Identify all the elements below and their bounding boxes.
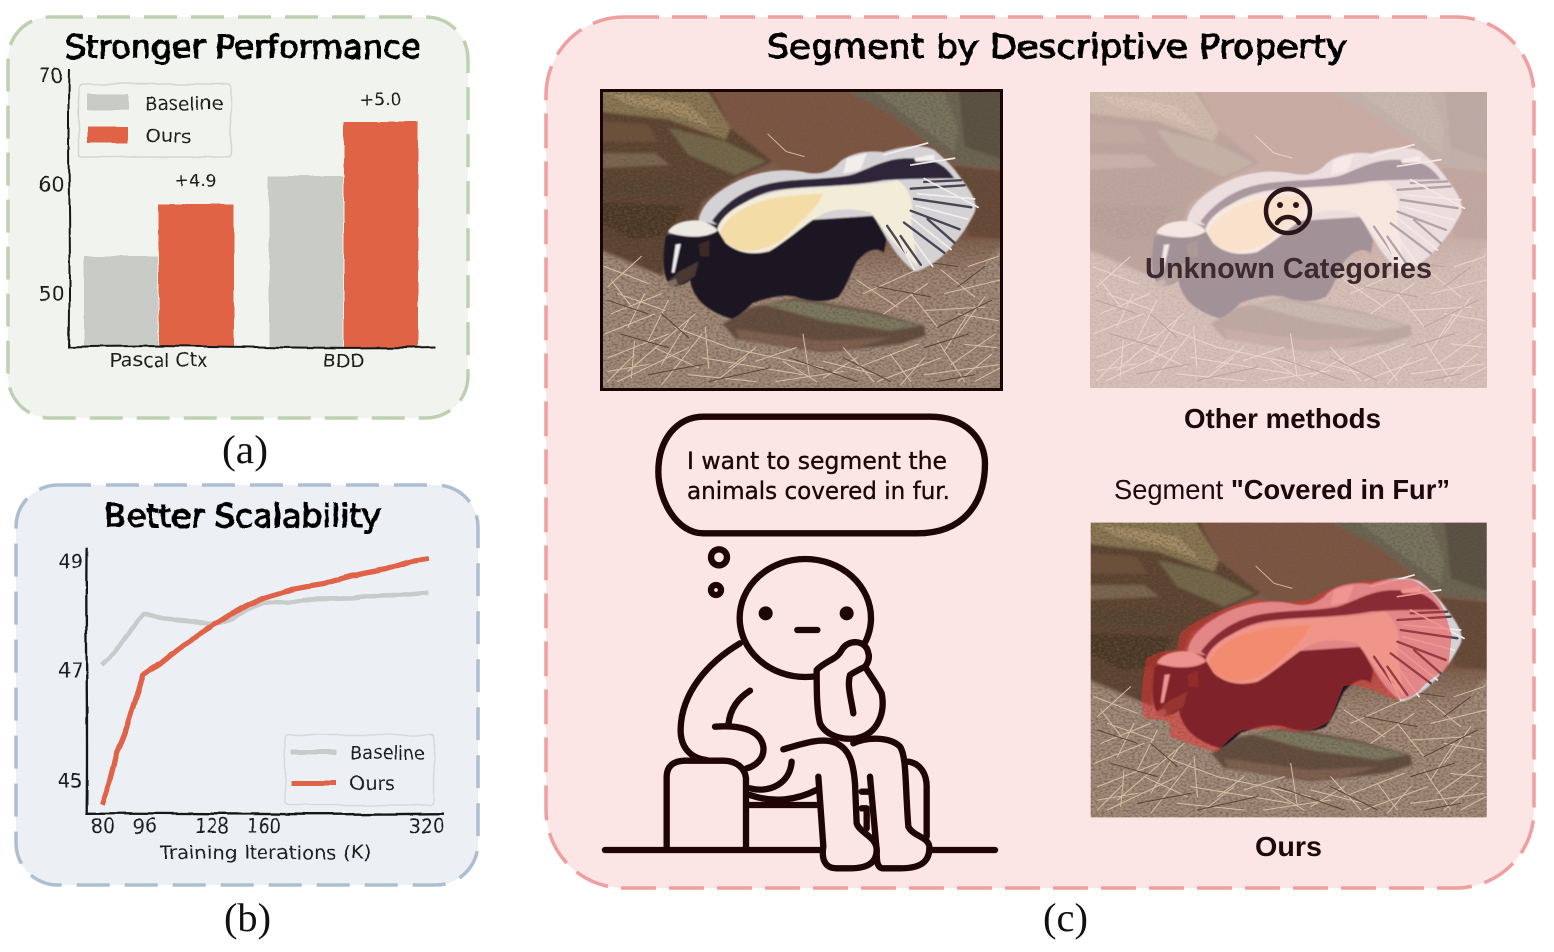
- heading: Better Scalability: Better Scalability: [104, 497, 381, 535]
- legend: Baseline: [145, 93, 223, 115]
- panel c: segment by descriptive property: [546, 17, 1534, 888]
- line chart: training iterations: 80: [90, 814, 115, 838]
- line chart: training iterations: 128: [195, 814, 229, 838]
- line chart: training iterations: 47: [58, 659, 83, 683]
- bar chart: performance comparison: 50: [39, 282, 64, 306]
- photo: other methods result: [1083, 86, 1494, 394]
- caption (c): (c): [1043, 895, 1088, 940]
- bar chart: performance comparison: BDD: [323, 350, 365, 372]
- panel a: stronger performance: [8, 17, 468, 418]
- line chart: training iterations: 96: [133, 814, 157, 838]
- legend: [285, 735, 434, 805]
- bar chart: performance comparison: +4.9: [175, 171, 216, 192]
- bar chart: performance comparison: [39, 64, 436, 372]
- icon: thinking person: [605, 549, 995, 868]
- panel b: better scalability: [16, 485, 478, 885]
- bar chart: performance comparison: 60: [39, 173, 64, 197]
- line chart: training iterations: 160: [247, 814, 281, 838]
- thought bubble: animals covered in fur.: [687, 477, 950, 505]
- label: Unknown Categories: Unknown Categories: [1145, 253, 1432, 285]
- legend: Ours: [145, 125, 191, 147]
- caption (a): (a): [222, 427, 268, 472]
- heading: Stronger Performance: Stronger Performance: [65, 28, 421, 66]
- thought bubble: I want to segment the: [687, 447, 947, 475]
- label: Ours: Ours: [1255, 831, 1322, 862]
- bar chart: performance comparison: 70: [39, 64, 63, 88]
- legend: [79, 84, 231, 157]
- photo: our segmentation result: [1084, 517, 1494, 823]
- line chart: training iterations: 320: [409, 814, 445, 838]
- thought bubble: [658, 417, 985, 533]
- photo: input skunk: [594, 84, 1008, 395]
- legend: Ours: [350, 773, 395, 795]
- line chart: training iterations: 45: [58, 769, 83, 793]
- legend: Baseline: [350, 742, 425, 764]
- icon: sad face: [1266, 189, 1310, 233]
- heading: Segment by Descriptive Property: Segment by Descriptive Property: [767, 27, 1347, 66]
- line chart: training iterations: Training Iterations (K): [159, 842, 371, 864]
- line chart: training iterations: 49: [58, 549, 83, 573]
- bar chart: performance comparison: +5.0: [360, 89, 401, 110]
- bar chart: performance comparison: Pascal Ctx: [110, 350, 208, 372]
- line chart: training iterations: [58, 547, 445, 864]
- caption (b): (b): [224, 895, 271, 940]
- label: Segment "Covered in Fur": Segment "Covered in Fur”: [1114, 474, 1450, 505]
- label: Other methods: Other methods: [1184, 403, 1381, 434]
